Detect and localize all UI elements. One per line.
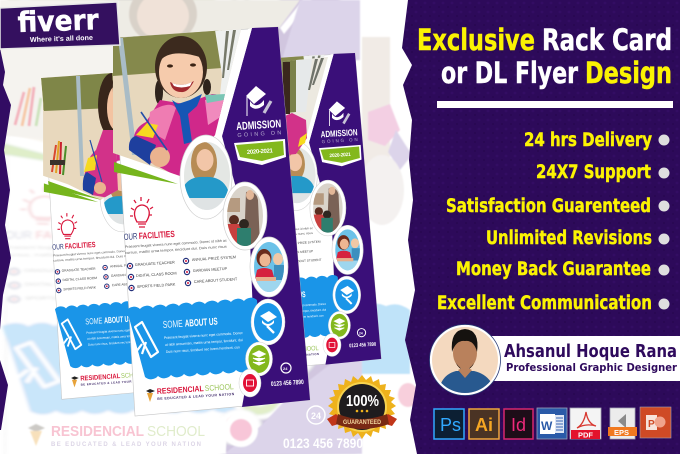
software icon: EPS [608, 408, 637, 439]
background: faded logo name [51, 424, 205, 448]
flyer school logo text: RESIDENCIAL [157, 384, 204, 396]
left back flyer [36, 67, 211, 399]
flyer facilities paragraph [125, 239, 227, 255]
flyer oval photo: classroom [223, 182, 267, 250]
flyer green books circle [246, 342, 272, 376]
software icon: PDF [570, 408, 601, 440]
flyer facilities list: GRADUATE TEACHER [135, 260, 175, 267]
flyer about paragraph [164, 331, 243, 354]
flyer facilities list: DIGITAL CLASS ROOM [136, 271, 177, 278]
guarantee seal: 100% [346, 393, 379, 410]
flyer some about us heading: ABOUT US [184, 317, 218, 330]
feature list: 24 hrs Delivery [524, 130, 652, 151]
guarantee seal [327, 375, 397, 439]
flyer oval photo: children [250, 237, 288, 297]
flyer school logo icon [146, 389, 155, 402]
flyer about paragraph: Praesent feugiat viverra nunc eget commodo. Donec [164, 331, 243, 340]
flyer admission heading: ADMISSION [236, 118, 282, 133]
right back flyer [213, 51, 381, 372]
flyer blue wave section [127, 298, 262, 379]
flyer diploma icon [135, 322, 158, 357]
main flyer [105, 25, 310, 416]
background: faded logo name: SCHOOL [147, 424, 205, 440]
flyer school logo text: SCHOOL [204, 382, 234, 393]
left back flyer photo with pens [41, 73, 118, 200]
flyer bulb icon [130, 197, 153, 227]
flyer blue graduation circle [251, 299, 285, 345]
guarantee seal: GUARANTEED [343, 420, 382, 426]
flyer hero photo [105, 25, 255, 185]
flyer facilities list: SPORTS FIELD PARK [137, 283, 176, 289]
software icon: InDesign [504, 409, 533, 439]
flyer facilities list: ANNUAL PRIZE SYSTEM [192, 255, 236, 262]
flyer red icon circle [239, 369, 261, 397]
flyer facilities list [127, 255, 238, 291]
flyer facilities paragraph: cursus, mattis urna tempor, tincidunt dui. Duis nunc risus [125, 245, 227, 255]
fiverr badge [0, 2, 120, 49]
flyer our facilities heading: FACILITIES [138, 229, 175, 241]
software icon: Word: W [541, 419, 553, 433]
flyer our facilities heading [123, 229, 175, 242]
background: faded logo name: RESIDENCIAL [51, 424, 144, 440]
flyer school logo text: BE EDUCATED & LEAD YOUR NATION [157, 392, 235, 401]
flyer about paragraph: Duis nunc risus, tincidunt nec lorem hendrerit. con [166, 345, 240, 354]
software icon: PowerPoint: P [648, 419, 655, 430]
software icon: Photoshop: Ps [440, 415, 461, 435]
software icon: Illustrator: Ai [475, 415, 493, 435]
flyer facilities list: GARDIAN MEETUP [193, 267, 228, 273]
title: or DL Flyer [441, 56, 579, 90]
flyer facilities paragraph: Praesent feugiat viverra nunc eget commodo. Donec id nibh ac [125, 239, 227, 249]
flyer year banner: 2020-2021 [247, 148, 274, 156]
flyer facilities list: CARE ABOUT STUDENT [194, 277, 238, 284]
title: Exclusive [417, 23, 535, 57]
left back flyer green stripe [48, 181, 102, 200]
background: faded lilac and blue shapes [14, 0, 424, 454]
flyer some about us heading [162, 317, 218, 331]
flyer white diagonal strip [217, 28, 252, 136]
feature list: 24X7 Support [536, 162, 651, 183]
flyer about paragraph: ut nibh accumsan, mattis urna tempor, tincidunt. dui [165, 338, 243, 347]
flyer green stripe [114, 162, 178, 184]
flyer going on subheading: GOING ON [237, 130, 282, 139]
flyer phone badge: 24 [283, 366, 288, 371]
background: faded logo icon [28, 424, 45, 446]
title [417, 23, 672, 90]
flyer purple side panel [222, 27, 310, 407]
right back flyer photo [276, 57, 328, 156]
flyer cap and pencil icon [246, 86, 271, 116]
software icon: Illustrator [469, 409, 499, 439]
flyer phone badge [281, 363, 291, 373]
flyer year banner [234, 139, 286, 165]
background: faded phone badge: 24 [311, 411, 321, 421]
software icon: Photoshop [434, 409, 464, 439]
software icon: PowerPoint [640, 407, 671, 438]
background: purple torn strip at left edge [0, 48, 11, 430]
background: faded phone number: 0123 456 7890 [283, 435, 363, 451]
background: faded logo name: BE EDUCATED & LEAD YOUR NATION [51, 442, 201, 448]
flyer phone number: 0123 456 7890 [271, 379, 304, 388]
background: faded photo top area [0, 0, 312, 140]
fiverr tagline: Where it's all done [30, 35, 93, 44]
software icon: InDesign: Id [511, 415, 526, 435]
fiverr wordmark: fiverr [17, 3, 99, 39]
background: enlarged faded flyer [0, 0, 403, 454]
software icon: Word [537, 408, 567, 439]
flyer our facilities heading: OUR [123, 231, 138, 242]
software icon: PDF: PDF [578, 430, 593, 440]
panel: purple right background with torn edge [402, 0, 680, 454]
feature bullets [658, 134, 670, 310]
software icon: EPS: EPS [614, 428, 629, 437]
feature list [437, 130, 652, 314]
designer portrait [430, 324, 500, 396]
designer name bar [490, 336, 680, 381]
background: faded phone badge [307, 406, 325, 424]
flyer white body [113, 27, 310, 416]
flyer some about us heading: SOME [162, 319, 183, 331]
title underline [437, 101, 673, 108]
flyer oval photo: girl in blue [180, 135, 235, 219]
flyer school logo text [157, 382, 235, 401]
